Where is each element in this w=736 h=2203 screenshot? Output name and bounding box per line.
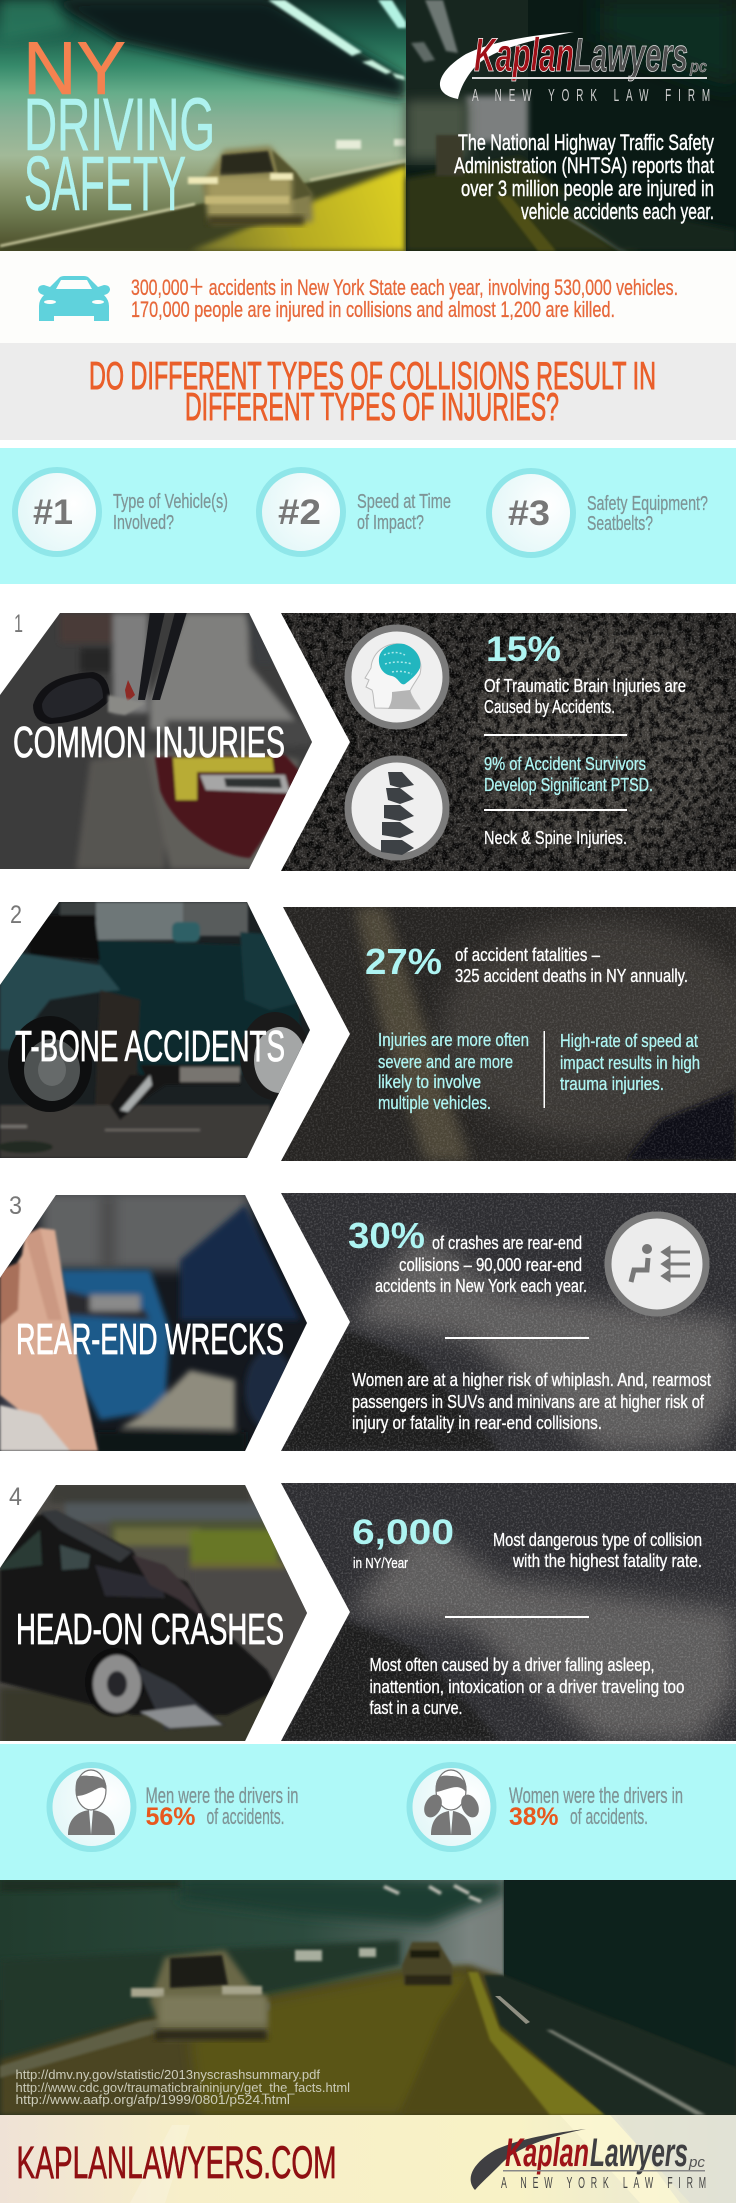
text: whiplash risk: injury or fatality in rear-end collisions. [352,1412,602,1433]
text: women: 38% [509,1803,558,1831]
factor 1: Involved? [113,512,174,534]
logo: Kaplan Lawyers: Kaplan [474,28,574,81]
text: speed: impact results in high [560,1052,700,1073]
car, far [402,1942,453,1985]
stat: PTSD [484,753,653,811]
icon: brain in head [348,628,446,726]
text: men: Men were the drivers in [146,1783,298,1808]
panel: drivers by gender [0,1744,736,1880]
heading: rear-end wrecks: REAR-END WRECKS [16,1315,284,1364]
photo: tunnel with cars [0,1880,736,2115]
factor 2: of Impact? [357,512,424,534]
text: causes [370,1654,684,1718]
website url: KAPLANLAWYERS.COM [16,2137,336,2188]
photo: wrecked black car [0,1483,320,1748]
stat: 15% traumatic brain injuries: Caused by Accidents. [484,696,615,717]
factor 1 [15,470,228,554]
photo: damaged teal car [0,902,320,1158]
text: most dangerous: with the highest fatality rate. [512,1550,702,1571]
logo: Kaplan Lawyers footer: A NEW YORK LAW FIRM [501,2173,706,2192]
heading: common injuries: COMMON INJURIES [13,718,285,767]
text: speed [560,1030,700,1094]
logo: Kaplan Lawyers: A NEW YORK LAW FIRM [472,86,710,106]
text: NHTSA statement [454,130,714,224]
stat: 30% of crashes: 30% [348,1215,425,1256]
text: severity: likely to involve [378,1071,481,1092]
number 4: 4 [9,1483,22,1511]
factor 2: #2 [278,493,321,532]
text: severity: Injuries are more often [378,1029,529,1050]
title: NY Driving Safety: DRIVING [24,83,215,166]
factor 1: Type of Vehicle(s) [113,491,228,513]
source links: http://www.cdc.gov/traumaticbraininjury/get_the_facts.html [16,2080,350,2095]
section 3: rear-end wrecks [0,1190,736,1454]
stat: 30% of crashes [348,1215,587,1296]
icon: spine [348,759,446,857]
text: accident statistics [131,275,678,322]
stat: 15% traumatic brain injuries: 15% [486,630,561,669]
logo: Kaplan Lawyers footer: Kaplan [505,2131,589,2175]
panel: three factors [0,448,736,584]
factor 2 [259,470,451,554]
footer band [0,2115,736,2203]
stat: PTSD: Develop Significant PTSD. [484,774,653,795]
text: whiplash risk [352,1369,711,1433]
section 4: head-on crashes [0,1483,736,1748]
stat: 27% of fatalities [365,941,688,986]
car, left [188,146,313,225]
source links: http://dmv.ny.gov/statistic/2013nyscrashsummary.pdf [16,2067,320,2082]
panel: asphalt background [281,613,736,871]
section 2: t-bone accidents [0,901,736,1161]
heading [89,355,656,429]
factor 1: #1 [33,493,73,532]
text: men: of accidents. [206,1804,284,1829]
stat: 6,000 per year [352,1513,454,1572]
stat: 15% traumatic brain injuries [484,630,686,736]
text: men [146,1783,298,1831]
logo: Kaplan Lawyers [440,32,710,101]
car, left [131,1950,268,2040]
text: most dangerous [493,1529,702,1571]
factor 3: Seatbelts? [587,513,653,535]
title: NY Driving Safety [26,42,212,211]
source links [16,2067,350,2107]
factor 3: #3 [508,494,550,533]
stat: 6,000 per year: in NY/Year [353,1555,408,1572]
icon: car [38,276,110,321]
number 2: 2 [10,901,22,929]
text: speed: High-rate of speed at [560,1030,698,1051]
title: NY Driving Safety: SAFETY [24,141,186,227]
text: men: 56% [146,1803,196,1831]
photo: white car [0,612,320,869]
panel: closing tunnel photo [0,1880,736,2203]
text: speed: trauma injuries. [560,1073,664,1094]
text: severity: severe and are more [378,1051,513,1072]
stat: 30% of crashes: accidents in New York each year. [375,1275,587,1296]
text: causes: fast in a curve. [370,1697,462,1718]
text: severity: multiple vehicles. [378,1092,491,1113]
stat: 27% of fatalities: of accident fatalities – [455,944,601,965]
factor 2: Speed at Time [357,491,451,513]
heading: t-bone accidents: T-BONE ACCIDENTS [15,1022,285,1071]
panel: NY state accident summary [0,251,736,343]
logo: Kaplan Lawyers footer: pc [688,2154,706,2171]
stat: 27% of fatalities: 27% [365,941,442,982]
photo: hands and blue car [0,1190,320,1454]
right dark side [406,0,736,251]
number 3: 3 [9,1192,22,1220]
heading: head-on crashes: HEAD-ON CRASHES [16,1605,284,1654]
source links: http://www.aafp.org/afp/1999/0801/p524.html [16,2092,290,2107]
text: women [509,1783,683,1831]
stat: 30% of crashes: of crashes are rear-end [432,1232,582,1253]
hero tunnel photo [0,0,736,251]
text: severity [378,1029,529,1113]
text: neck and spine: Neck & Spine Injuries. [484,827,627,848]
factor 3 [489,471,708,555]
stat: 15% traumatic brain injuries: Of Traumatic Brain Injuries are [484,675,686,696]
icon: woman [410,1765,494,1849]
stat: PTSD: 9% of Accident Survivors [484,753,646,774]
stat: 30% of crashes: collisions – 90,000 rear-end [399,1254,582,1275]
logo: Kaplan Lawyers footer [471,2129,706,2192]
logo: Kaplan Lawyers: pc [689,57,707,76]
text: causes: Most often caused by a driver falling asleep, [370,1654,654,1675]
title: NY Driving Safety: NY [23,26,126,110]
panel: asphalt background [281,1483,736,1741]
stat: 6,000 per year: 6,000 [352,1513,454,1552]
panel: question heading [0,343,736,440]
section 1: common injuries [0,610,736,871]
panel: hero header [0,0,736,251]
icon: seated passenger with arrows [608,1215,706,1313]
number 1: 1 [14,610,23,638]
panel: asphalt background [281,1193,736,1451]
icon: man [50,1765,134,1849]
text: women: of accidents. [570,1804,648,1829]
panel: asphalt background [281,907,736,1161]
